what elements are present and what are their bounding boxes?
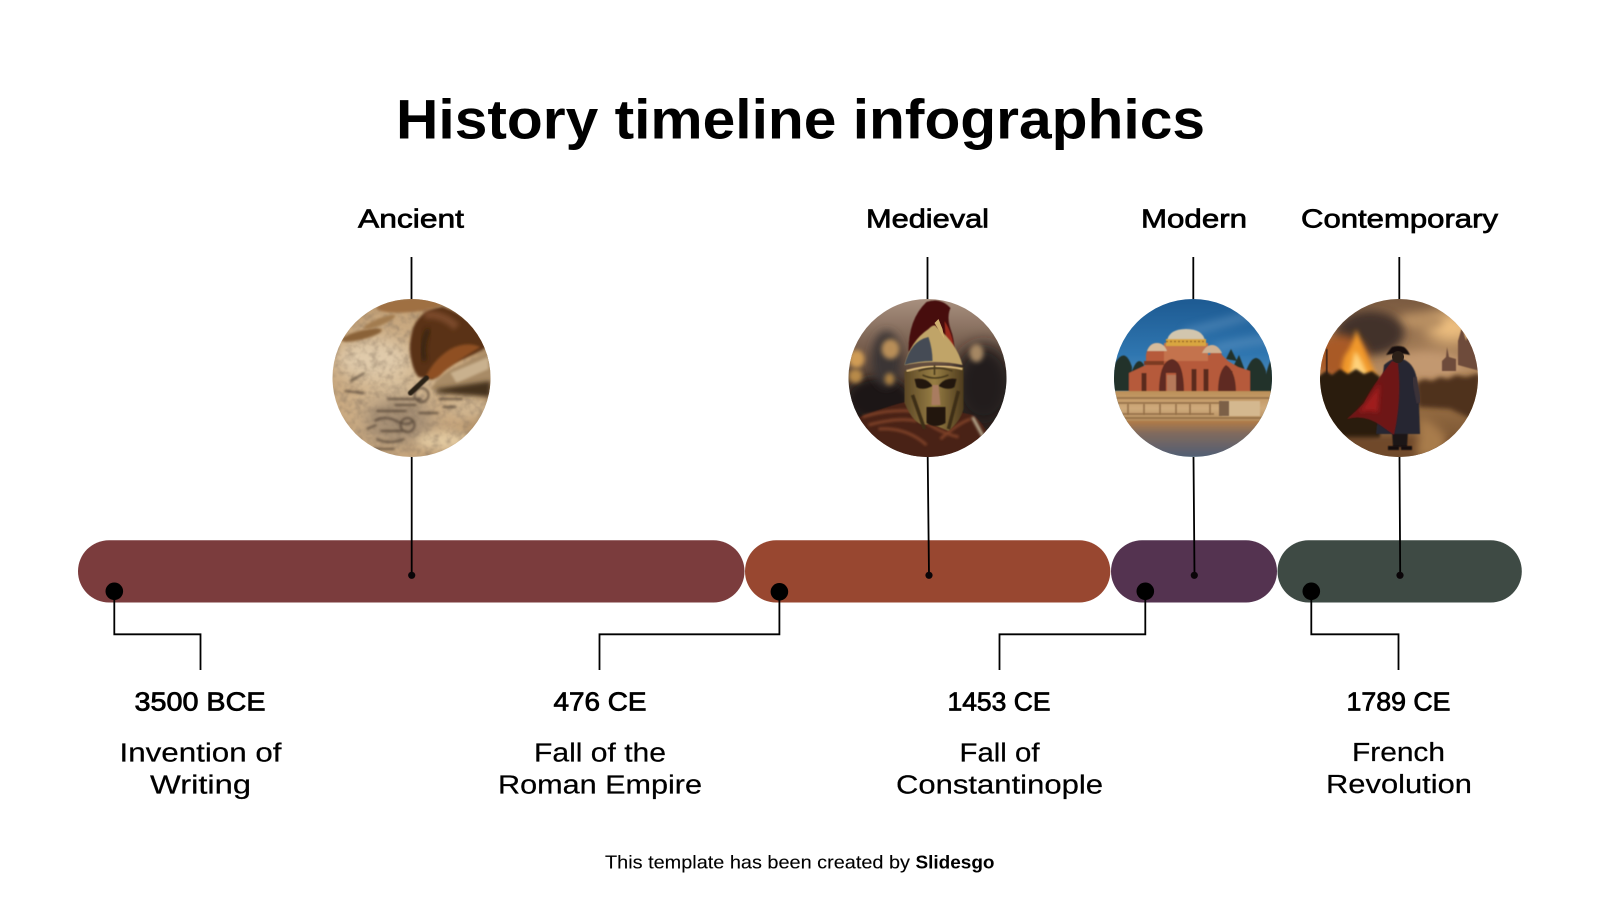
marker: 3500 BCE xyxy=(106,582,123,600)
description: French xyxy=(1352,739,1445,767)
description: Fall of xyxy=(960,740,1041,768)
image: medieval warrior xyxy=(846,299,1014,464)
image: French Revolution figure xyxy=(1312,299,1480,457)
crowd left xyxy=(1318,369,1380,445)
marker: 1789 CE xyxy=(1302,582,1320,600)
segment: ancient xyxy=(78,540,744,602)
marker: Medieval xyxy=(925,572,933,579)
connector: Modern xyxy=(1193,257,1194,575)
period connectors xyxy=(412,257,1400,575)
credit brand: Slidesgo xyxy=(916,852,995,872)
date connectors xyxy=(114,591,1398,670)
crowd right xyxy=(1416,373,1480,423)
event: 3500 BCE xyxy=(120,689,283,800)
marker: 1453 CE xyxy=(1136,582,1154,600)
segment: medieval xyxy=(745,540,1110,602)
event: 1453 CE xyxy=(896,689,1103,800)
label: Contemporary: Contemporary xyxy=(1301,204,1498,234)
connector: 476 CE xyxy=(600,591,779,670)
marker: Ancient xyxy=(408,572,415,579)
description: Invention of xyxy=(120,740,283,768)
image: Hagia Sophia xyxy=(1112,299,1274,457)
image: hand carving tablet xyxy=(332,295,490,457)
footer credit xyxy=(605,852,995,872)
label: Ancient: Ancient xyxy=(358,204,465,234)
connector: 1453 CE xyxy=(1000,591,1145,670)
connector: Contemporary xyxy=(1398,257,1401,575)
marker: Contemporary xyxy=(1396,572,1404,579)
title: History timeline infographics xyxy=(396,88,1205,150)
description line two: Revolution xyxy=(1326,771,1472,799)
connector: Medieval xyxy=(928,257,929,575)
description line two: Roman Empire xyxy=(498,772,702,800)
label: Medieval: Medieval xyxy=(866,204,989,234)
label: Modern: Modern xyxy=(1141,204,1247,234)
date markers xyxy=(106,582,1320,601)
date: 1453 CE xyxy=(948,689,1050,717)
connector: Ancient xyxy=(410,257,413,575)
infographic canvas xyxy=(78,98,1522,872)
connector: 3500 BCE xyxy=(114,591,200,670)
connector: 1789 CE xyxy=(1311,591,1398,670)
trees xyxy=(1112,349,1274,393)
marker: 476 CE xyxy=(771,583,788,601)
timeline bar xyxy=(78,540,1522,602)
segment: modern xyxy=(1111,540,1277,602)
description line two: Constantinople xyxy=(896,772,1103,800)
event: 1789 CE xyxy=(1326,689,1472,799)
marker: Modern xyxy=(1191,572,1198,579)
date: 3500 BCE xyxy=(134,689,266,717)
date: 476 CE xyxy=(554,689,646,717)
segment: contemporary xyxy=(1278,540,1522,602)
period markers xyxy=(408,572,1404,579)
event: 476 CE xyxy=(498,689,702,800)
credit text: This template has been created by xyxy=(605,852,910,872)
description line two: Writing xyxy=(150,772,251,800)
period labels xyxy=(358,204,1498,234)
date: 1789 CE xyxy=(1346,689,1450,717)
description: Fall of the xyxy=(534,740,666,768)
